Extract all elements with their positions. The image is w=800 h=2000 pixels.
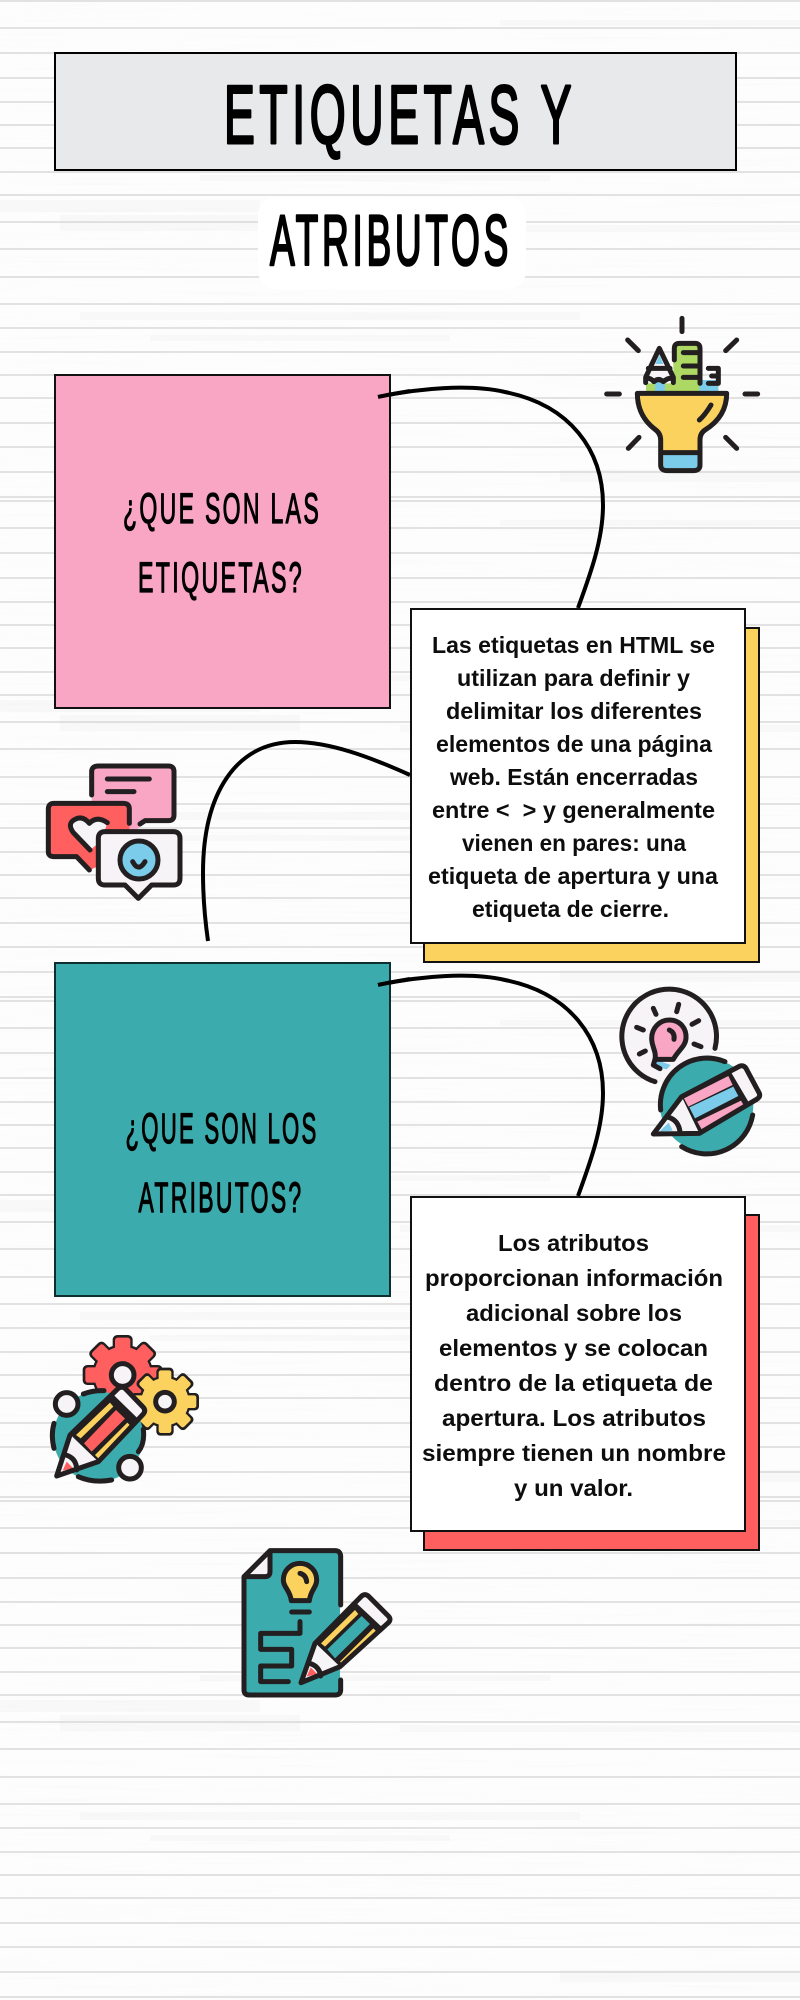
body text: atributos: proporcionan información <box>425 1265 723 1291</box>
connector curve: text to teal box <box>203 742 410 941</box>
body text: etiquetas: vienen en pares: una <box>462 830 686 856</box>
heading text: que son las etiquetas: ¿QUE SON LAS <box>123 485 321 533</box>
icon: chat bubbles <box>48 766 180 898</box>
body text: atributos: y un valor. <box>514 1475 633 1501</box>
body text: etiquetas: entre < > y generalmente <box>432 797 715 823</box>
body text: etiquetas: Las etiquetas en HTML se <box>432 632 715 658</box>
body text: atributos: Los atributos <box>498 1230 649 1256</box>
panel: etiquetas explanation <box>411 609 745 943</box>
icon: idea bulb and pencil <box>622 989 760 1154</box>
body text: etiquetas: web. Están encerradas <box>449 764 698 790</box>
red offset card <box>424 1215 759 1550</box>
heading text: que son las etiquetas <box>123 485 321 602</box>
panel: atributos explanation <box>411 1197 745 1531</box>
body text: atributos: siempre tienen un nombre <box>422 1440 726 1466</box>
body text: etiquetas: etiqueta de cierre. <box>472 896 669 922</box>
subtitle: ATRIBUTOS: ATRIBUTOS <box>270 202 512 281</box>
body text: etiquetas: utilizan para definir y <box>457 665 690 691</box>
yellow offset card <box>424 628 759 962</box>
heading text: que son los atributos: ¿QUE SON LOS <box>126 1105 318 1153</box>
connector curve: teal box to text <box>378 976 603 1196</box>
body text: atributos: apertura. Los atributos <box>442 1405 706 1431</box>
panel: teal heading card <box>55 963 390 1296</box>
body text: atributos <box>422 1230 726 1501</box>
subtitle pill <box>258 197 526 289</box>
icon: gears and pencil <box>52 1335 199 1482</box>
curve start over pink card <box>378 391 410 397</box>
body text: etiquetas: etiqueta de apertura y una <box>428 863 718 889</box>
icon: light bulb with design tools <box>607 318 758 471</box>
body text: etiquetas: elementos de una página <box>436 731 712 757</box>
body text: atributos: adicional sobre los <box>466 1300 682 1326</box>
connector curve: pink box to text <box>378 388 603 608</box>
heading text: que son los atributos: ATRIBUTOS? <box>138 1174 304 1222</box>
heading text: que son los atributos <box>126 1105 318 1222</box>
heading text: que son las etiquetas: ETIQUETAS? <box>138 554 304 602</box>
panel: pink heading card <box>55 375 390 708</box>
body text: atributos: elementos y se colocan <box>439 1335 708 1361</box>
body text: etiquetas <box>428 632 718 922</box>
body text: etiquetas: delimitar los diferentes <box>446 698 702 724</box>
title box <box>55 53 736 170</box>
body text: atributos: dentro de la etiqueta de <box>434 1370 713 1396</box>
curve start over teal card <box>378 979 410 985</box>
icon: document with idea and pencil <box>244 1551 390 1695</box>
